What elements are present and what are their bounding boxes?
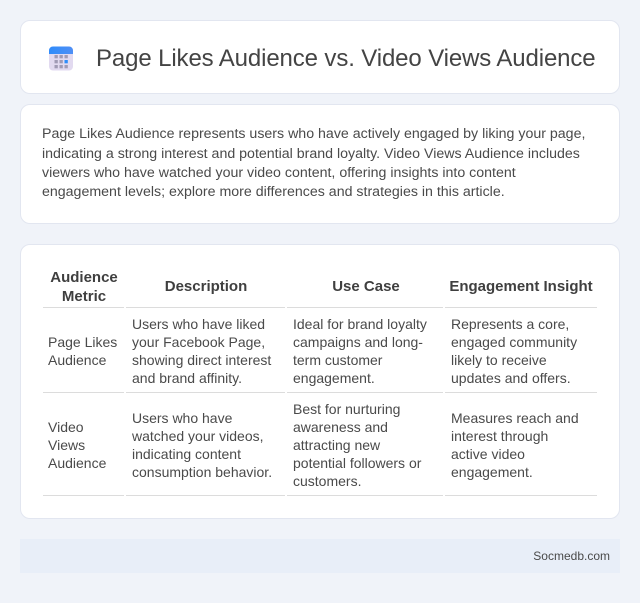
title: Page Likes Audience vs. Video Views Audience — [96, 45, 596, 72]
intro text: viewers who have watched your video content, offering insights into content — [42, 165, 516, 181]
row: page likes audience: term customer — [293, 352, 382, 368]
row: video views audience: indicating content — [132, 446, 241, 462]
row: video views audience: consumption behavior. — [132, 464, 272, 480]
row: page likes audience: Page Likes — [48, 334, 117, 350]
table header: Use Case — [332, 278, 400, 295]
footer bar — [20, 539, 620, 573]
row: page likes audience: Audience — [48, 352, 106, 368]
row: page likes audience: Represents a core, — [451, 316, 569, 332]
row: video views audience: Measures reach and — [451, 410, 579, 426]
row: video views audience: engagement. — [451, 464, 533, 480]
intro text — [42, 126, 585, 200]
row: page likes audience: showing direct interest — [132, 352, 271, 368]
footer source text: Socmedb.com — [533, 549, 610, 563]
row: video views audience: Users who have — [132, 410, 232, 426]
row: video views audience: awareness and — [293, 419, 388, 435]
row: page likes audience: engagement. — [293, 370, 375, 386]
row: video views audience: Audience — [48, 455, 106, 471]
panel: introduction — [20, 104, 620, 224]
row: page likes audience: Users who have liked — [132, 316, 265, 332]
row: video views audience: watched your videos, — [132, 428, 264, 444]
row: video views audience: Best for nurturing — [293, 401, 400, 417]
row: video views audience: potential followers or — [293, 455, 421, 471]
intro text: indicating a strong interest and potential brand loyalty. Video Views Audience includes — [42, 146, 580, 162]
table header: Audience — [50, 269, 118, 286]
intro text: engagement levels; explore more differences and strategies in this article. — [42, 184, 505, 200]
table header: Metric — [62, 288, 106, 305]
row: video views audience — [48, 401, 579, 489]
intro text: Page Likes Audience represents users who have actively engaged by liking your page, — [42, 126, 585, 142]
row: page likes audience: likely to receive — [451, 352, 547, 368]
icon: calendar — [49, 46, 73, 70]
row: page likes audience: updates and offers. — [451, 370, 571, 386]
row: page likes audience: engaged community — [451, 334, 577, 350]
row: page likes audience: your Facebook Page, — [132, 334, 265, 350]
row: page likes audience: Ideal for brand loyalty — [293, 316, 427, 332]
table header: Engagement Insight — [449, 278, 593, 295]
row: video views audience: attracting new — [293, 437, 380, 453]
row: video views audience: active video — [451, 446, 525, 462]
table header — [50, 269, 593, 305]
row: page likes audience: campaigns and long- — [293, 334, 423, 350]
row: video views audience: Views — [48, 437, 85, 453]
row: page likes audience — [48, 316, 578, 386]
table header: Description — [165, 278, 247, 295]
panel: comparison table — [20, 244, 620, 519]
row: video views audience: interest through — [451, 428, 548, 444]
row: video views audience: customers. — [293, 473, 361, 489]
panel: title card — [20, 20, 620, 94]
row: page likes audience: and brand affinity. — [132, 370, 242, 386]
row: video views audience: Video — [48, 419, 84, 435]
